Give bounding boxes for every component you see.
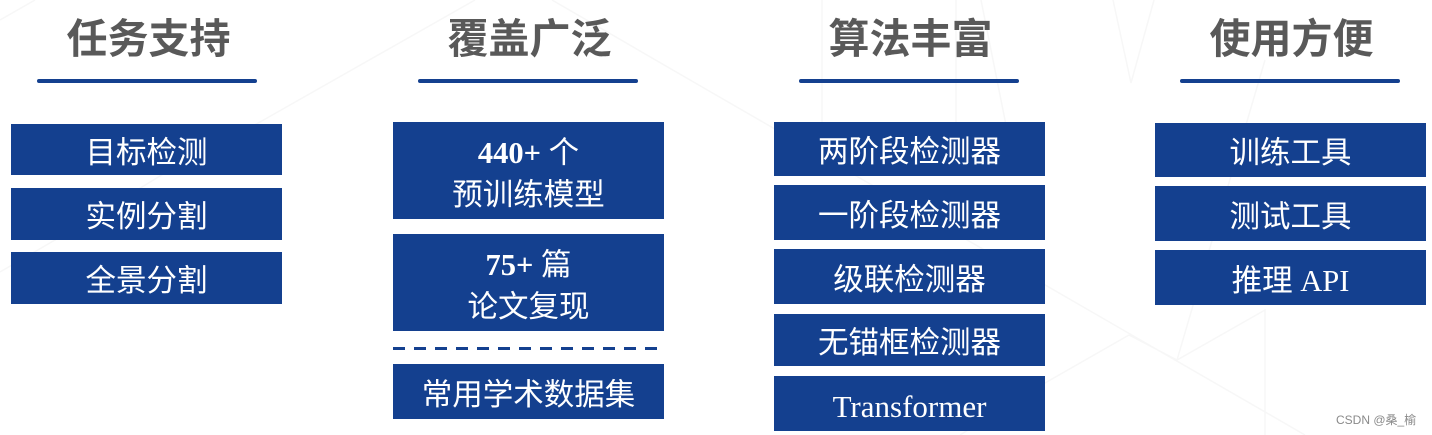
heading underline: broad coverage	[418, 79, 638, 83]
item: common datasets	[393, 364, 664, 419]
item: panoptic segmentation	[11, 252, 282, 304]
item: papers reproduced	[393, 234, 664, 331]
item: inference API	[1155, 250, 1426, 305]
heading underline: rich algorithms	[799, 79, 1019, 83]
item: training tools	[1155, 123, 1426, 177]
item: instance segmentation	[11, 188, 282, 240]
item: cascade detectors: 级联检测器	[833, 262, 986, 296]
item: pretrained models	[393, 122, 664, 219]
item: transformer: Transformer	[833, 388, 986, 424]
item: papers reproduced: 75+ 篇 论文复现	[468, 248, 590, 324]
item: one-stage detectors	[774, 185, 1045, 240]
item: training tools: 训练工具	[1230, 136, 1352, 170]
item: one-stage detectors: 一阶段检测器	[818, 198, 1001, 232]
item: transformer	[774, 376, 1045, 431]
heading: task support: 任务支持	[66, 16, 230, 62]
dashed separator	[393, 347, 657, 350]
item: pretrained models: 440+ 个 预训练模型	[452, 136, 605, 212]
item: cascade detectors	[774, 249, 1045, 304]
item: instance segmentation: 实例分割	[86, 200, 208, 234]
heading underline: easy to use	[1180, 79, 1400, 83]
heading underline: task support	[37, 79, 257, 83]
item: common datasets: 常用学术数据集	[422, 378, 635, 412]
item: object detection	[11, 124, 282, 175]
item: two-stage detectors	[774, 122, 1045, 176]
item: anchor-free detectors: 无锚框检测器	[818, 326, 1001, 360]
item: two-stage detectors: 两阶段检测器	[818, 135, 1001, 169]
item: inference API: 推理 API	[1232, 264, 1349, 298]
item: testing tools	[1155, 186, 1426, 241]
item: anchor-free detectors	[774, 314, 1045, 366]
watermark: CSDN @桑_榆	[1336, 413, 1416, 427]
item: object detection: 目标检测	[86, 136, 208, 170]
heading: easy to use: 使用方便	[1210, 16, 1374, 62]
item: testing tools: 测试工具	[1230, 200, 1352, 234]
item: panoptic segmentation: 全景分割	[86, 264, 208, 298]
heading: broad coverage: 覆盖广泛	[448, 16, 612, 62]
heading: rich algorithms: 算法丰富	[828, 16, 992, 62]
